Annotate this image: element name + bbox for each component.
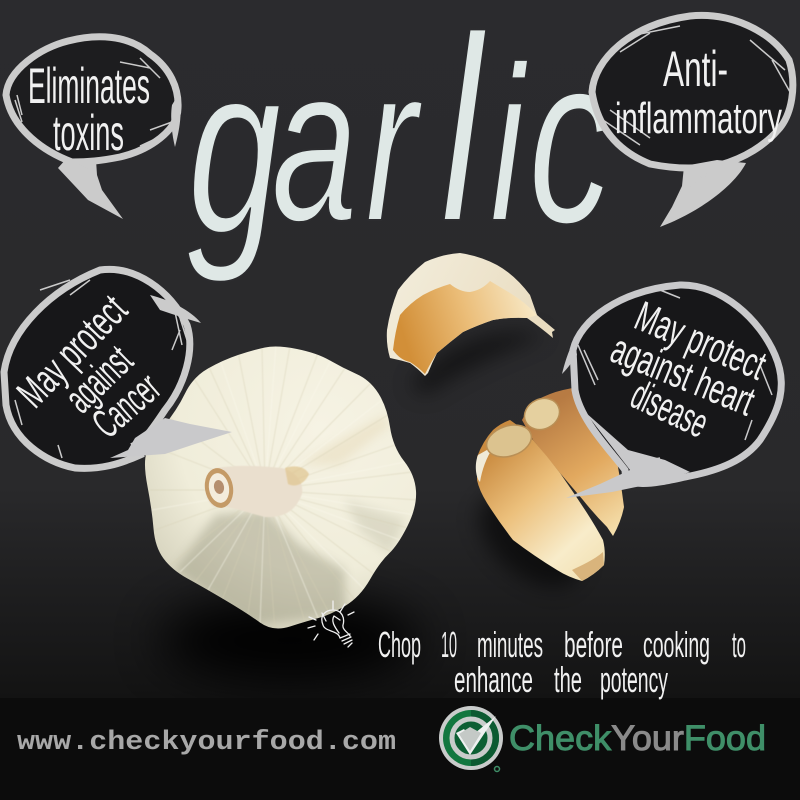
speech bubble: may protect against cancer [4,269,232,468]
bubble text: Anti- [663,41,728,97]
footer band [0,698,800,800]
title: garlic: a [272,21,358,268]
speech bubble: may protect against cancer: Cancer [83,363,169,447]
bubble outline [4,269,190,468]
bulb stem [205,466,302,517]
speech bubble: eliminates toxins: toxins [53,105,124,161]
logo badge [439,706,503,770]
pair of garlic cloves, right [462,387,624,605]
tip text: potency [600,659,668,700]
whole garlic bulb photo [145,345,418,632]
speech bubble: eliminates toxins [6,37,181,219]
tip text: cooking [643,624,710,665]
speech bubble: may protect against heart disease: disease [624,371,716,447]
brand logo [439,706,766,772]
single garlic clove, top [387,253,555,395]
pair shadow [462,475,598,605]
tip text [378,624,746,700]
bubble outline [6,37,178,162]
logo wordmark: CheckYourFood [509,719,766,758]
back clove cut end [519,393,565,435]
speech bubble: may protect against cancer: against [56,336,142,421]
stem cut end [202,466,236,510]
bubble tail [566,412,690,498]
title: garlic: c [528,4,613,273]
registered mark [494,766,500,772]
website url: www.checkyourfood.com [17,728,396,758]
front clove cut end [482,420,536,462]
speech bubble: may protect against heart disease [562,285,781,498]
garlic infographic canvas: to [732,624,746,665]
title: garlic: g [188,14,281,283]
dark shadow beneath the garlic bulb [160,598,420,682]
title: garlic: r [365,21,422,268]
bubble tail pointing at bulb [110,418,232,458]
bubble tail [58,159,123,219]
bubble text: May protect [8,286,136,416]
tip text: Chop [378,624,421,665]
bubble outline [573,285,781,484]
clove papery skin [387,253,555,376]
bulb body [145,347,416,629]
tip text: the [554,659,582,700]
tip text: enhance [454,659,533,700]
back clove [522,387,624,536]
tip text: 10 [441,624,457,665]
bubble text: Eliminates [28,58,150,114]
bubble tail [660,160,746,227]
speech bubble: anti-inflammatory [592,15,793,227]
clove shadow [410,332,545,395]
icon: light bulb tip [308,601,354,647]
tip text: before [564,624,623,665]
bubble outline [592,15,793,168]
clove golden flesh [393,281,537,374]
title: garlic: i [490,21,528,268]
title: garlic [188,0,613,283]
front clove [477,420,605,581]
bulb shading and ribs [150,345,418,632]
tip text: minutes [477,624,543,665]
